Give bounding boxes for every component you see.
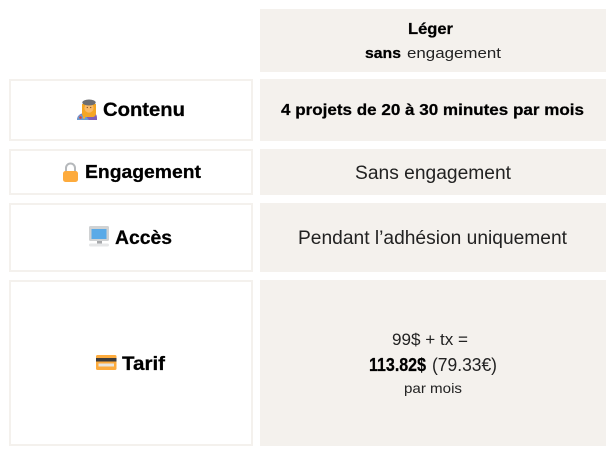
row: contenu <box>10 79 606 141</box>
plan subtitle: sans <box>365 45 401 62</box>
value cell: acces <box>260 203 606 272</box>
row: acces <box>10 203 606 272</box>
plan subtitle <box>365 45 502 62</box>
label cell: acces <box>10 204 252 271</box>
icon: credit card emoji <box>96 355 116 370</box>
icon: padlock emoji <box>63 164 78 182</box>
value text: Sans engagement <box>355 163 512 184</box>
price total: (79.33€) <box>432 355 497 375</box>
price formula: 99$ + tx = <box>392 330 468 349</box>
row label: Contenu <box>103 100 185 121</box>
panel: plan header <box>260 9 606 72</box>
value cell: contenu <box>260 79 606 141</box>
row: tarif <box>10 280 606 446</box>
label cell: engagement <box>10 150 252 194</box>
row label: Accès <box>115 228 172 249</box>
value text: Pendant l’adhésion uniquement <box>298 228 568 249</box>
icon: computer emoji <box>89 226 109 246</box>
plan subtitle: engagement <box>407 45 502 62</box>
row label: Tarif <box>122 354 166 375</box>
value cell: engagement <box>260 149 606 195</box>
value cell: tarif <box>260 280 606 446</box>
row label: Engagement <box>85 162 201 182</box>
price total <box>369 355 497 375</box>
label cell: tarif <box>10 281 252 445</box>
plan name: Léger <box>408 21 453 38</box>
icon: artist emoji <box>77 100 97 120</box>
price period: par mois <box>404 380 462 396</box>
price total: 113.82$ <box>369 355 426 375</box>
row: engagement <box>10 149 606 195</box>
label cell: contenu <box>10 80 252 140</box>
value text: 4 projets de 20 à 30 minutes par mois <box>281 102 584 119</box>
